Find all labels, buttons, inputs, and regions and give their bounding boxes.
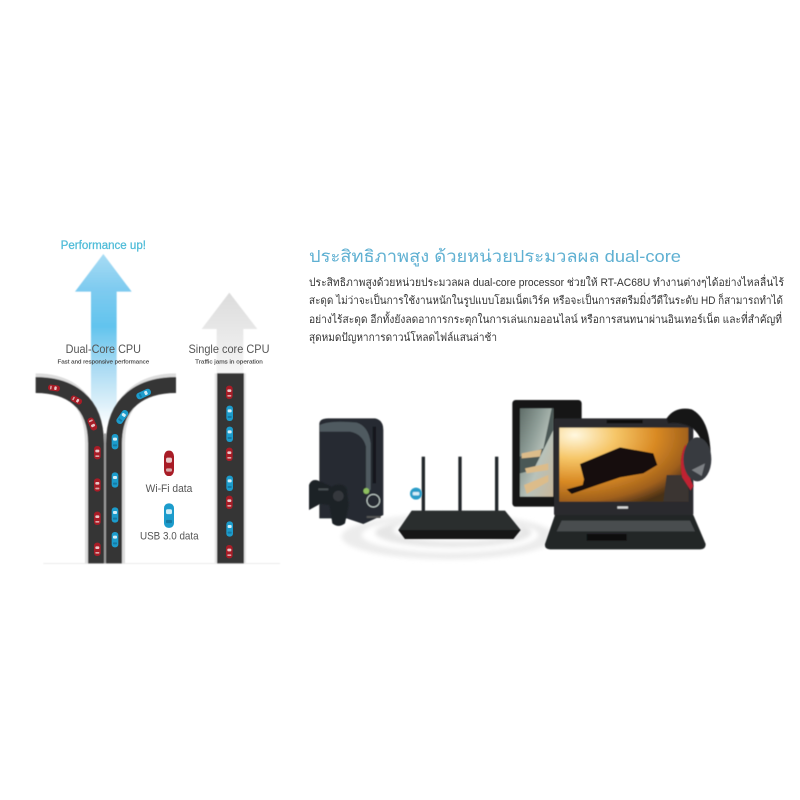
panel: CPU road diagram xyxy=(36,238,280,564)
cars: traffic on single-core road xyxy=(226,386,233,558)
label: Dual-Core CPU xyxy=(57,343,149,365)
legend: USB 3.0 data xyxy=(140,503,199,543)
heading: Performance up!: Performance up! xyxy=(61,238,146,252)
road: ground shadow xyxy=(43,563,280,564)
text block: description xyxy=(309,274,784,344)
label: Dual-Core CPU: Fast and responsive performance xyxy=(57,359,149,365)
legend: USB 3.0 data: USB 3.0 data xyxy=(140,531,199,543)
road: single-core lane xyxy=(215,373,246,563)
legend: Wi-Fi data: Wi-Fi data xyxy=(146,483,193,495)
icon: 5GHz badge xyxy=(410,488,422,500)
label: Single core CPU: Traffic jams in operation xyxy=(195,359,263,365)
road: dual-core merging lanes xyxy=(36,382,176,563)
icon: game console xyxy=(319,418,383,524)
heading: dual-core performance title: ประสิทธิภาพสูง ด้วยหน่วยประมวลผล dual-core xyxy=(309,247,681,267)
icon: tablet xyxy=(512,400,582,507)
arrow: dual-core blue arrow xyxy=(75,254,132,427)
icon: router with three antennas xyxy=(398,457,521,539)
label: Dual-Core CPU: Dual-Core CPU xyxy=(66,343,141,356)
label: Single core CPU xyxy=(188,343,269,365)
icon: game controller xyxy=(309,480,349,526)
text block: description: สุดหมดปัญหาการดาวน์โหลดไฟล์แสนล่าช้า xyxy=(309,330,497,344)
arrow: single-core grey arrow xyxy=(202,293,257,373)
label: Single core CPU: Single core CPU xyxy=(188,343,269,356)
wifi signal rings under router xyxy=(342,514,555,559)
cars: blue USB data on dual-core road xyxy=(112,388,152,547)
panel: connected devices illustration xyxy=(309,400,711,559)
cars: red Wi-Fi data on dual-core road xyxy=(48,384,101,556)
icon: laptop xyxy=(545,418,706,549)
icon: headphones xyxy=(667,409,711,491)
legend: Wi-Fi data xyxy=(146,451,193,495)
